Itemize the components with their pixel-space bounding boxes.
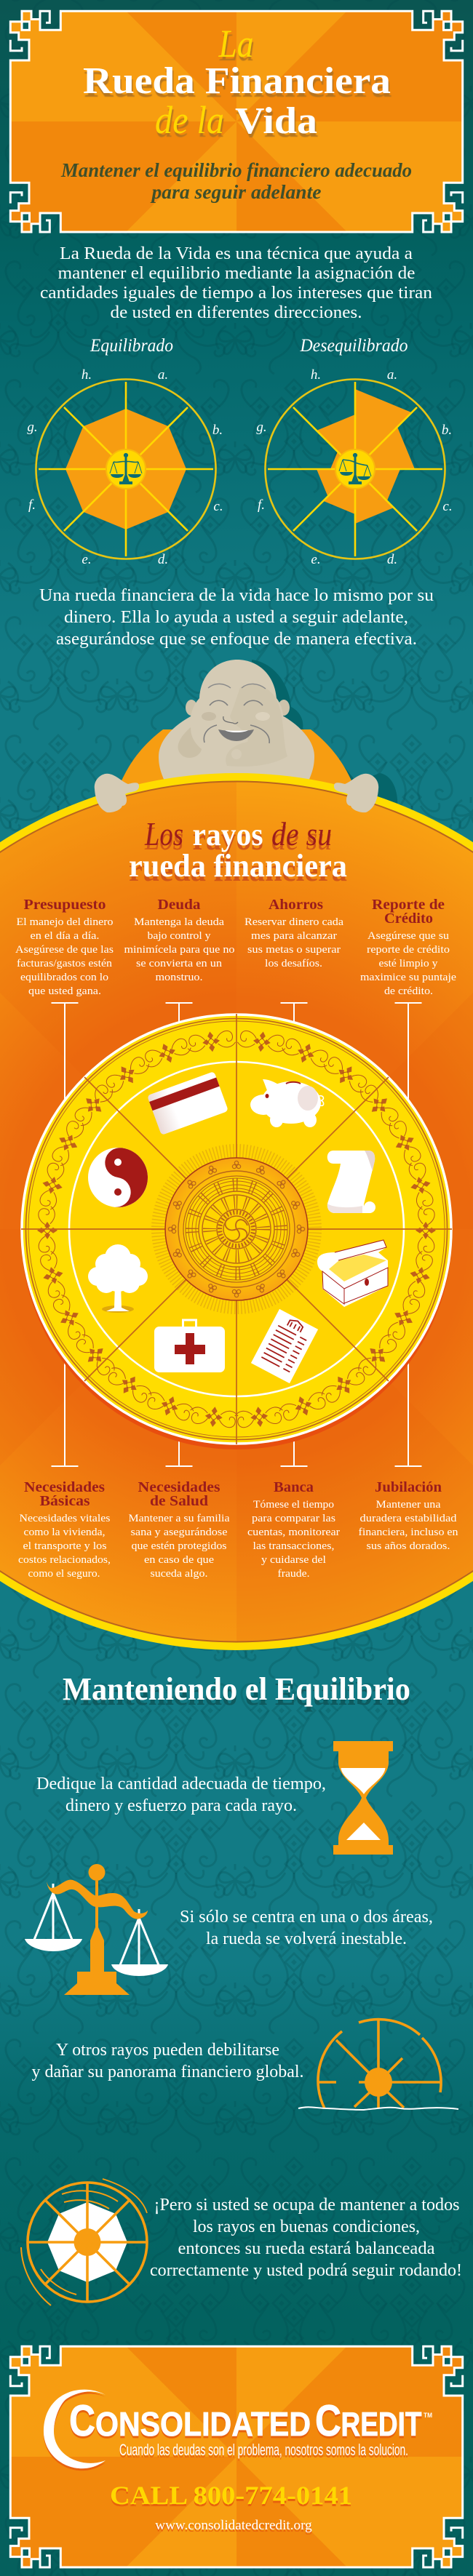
section heading: rayos [192, 817, 263, 852]
callout: necesidades de salud: Mantener a su familia [128, 1513, 230, 1524]
callout: deuda: monstruo. [156, 972, 202, 983]
axis labels: h. [311, 367, 321, 383]
logo wordmark: REDIT [341, 2405, 422, 2443]
logo wordmark: C [69, 2396, 95, 2445]
connector lines [51, 1003, 422, 1466]
section heading: Los [144, 815, 183, 852]
callout: presupuesto: equilibrados con lo [20, 972, 108, 983]
section heading [129, 815, 347, 884]
heading: manteniendo el equilibrio: Manteniendo el Equilibrio [63, 1671, 410, 1707]
chart: balanced wheel: Equilibrado [90, 336, 173, 356]
axis labels: f. [258, 497, 265, 513]
callout: banca: fraude. [278, 1568, 310, 1580]
icon: hourglass [333, 1741, 393, 1855]
header panel [0, 0, 473, 243]
icon: balanced wheel [21, 2179, 147, 2305]
icon: piggy bank [250, 1079, 324, 1127]
callout: deuda: se convierta en un [136, 958, 223, 969]
chart: unbalanced wheel [256, 336, 453, 567]
callout: reporte de credito [360, 897, 456, 997]
section heading: de su [271, 815, 332, 852]
callout: necesidades basicas: como el seguro. [28, 1568, 100, 1580]
callout: ahorros: sus metas o superar [247, 944, 341, 956]
icon: scroll [327, 1151, 375, 1213]
subtitle [60, 159, 412, 203]
illustration: smiling monk [118, 660, 397, 815]
axis labels: g. [256, 420, 267, 435]
wheel hub [165, 1158, 308, 1300]
callout: presupuesto: facturas/gastos estén [17, 958, 113, 969]
icon: tilted scales [339, 453, 371, 484]
text: dedique: Dedique la cantidad adecuada de tiempo, [36, 1775, 326, 1793]
title: Vida [235, 100, 317, 142]
callout: presupuesto [15, 897, 114, 997]
text: si solo se centra [180, 1908, 433, 1948]
axis labels: c. [442, 499, 453, 514]
callout: reporte de credito: maximice su puntaje [360, 972, 456, 983]
icon: credit card [147, 1071, 228, 1135]
axis labels: d. [387, 552, 397, 567]
logo wordmark: ONSOLIDATED [95, 2405, 311, 2443]
text: dedique [36, 1775, 326, 1815]
subtitle: Mantener el equilibrio financiero adecuado [60, 159, 412, 181]
second paragraph: Una rueda financiera de la vida hace lo mismo por su [39, 586, 434, 605]
wheel [21, 1014, 452, 1449]
axis labels: d. [158, 552, 168, 567]
intro text [40, 244, 432, 322]
intro text: de usted en diferentes direcciones. [111, 303, 362, 322]
subtitle: para seguir adelante [150, 181, 322, 203]
footer panel [0, 2335, 473, 2576]
callout: necesidades de salud: sana y asegurándose [131, 1527, 228, 1538]
axis labels: f. [28, 497, 36, 513]
callout: necesidades de salud: que estén protegidos [131, 1540, 227, 1552]
axis labels: h. [82, 367, 92, 383]
monk shadow [251, 660, 397, 815]
logo crescent [44, 2390, 106, 2468]
phone number: CALL 800-774-0141 [110, 2481, 352, 2510]
callout: ahorros: los desafíos. [265, 958, 322, 969]
text: pero si usted: correctamente y usted podrá seguir rodando! [150, 2261, 462, 2280]
ornament ring [37, 1028, 436, 1430]
axis labels [256, 367, 453, 567]
body [159, 716, 314, 784]
section heading: rueda financiera [129, 848, 347, 884]
callout: deuda: bajo control y [147, 930, 211, 942]
intro text: mantener el equilibrio mediante la asignación de [58, 264, 415, 283]
callout: necesidades de salud: Necesidades [138, 1479, 220, 1495]
callout: deuda [124, 897, 234, 983]
callout: ahorros: mes para alcanzar [251, 930, 337, 942]
callout: banca: cuentas, monitorear [247, 1527, 340, 1538]
callout: presupuesto: que usted gana. [28, 985, 101, 997]
title [83, 22, 391, 142]
callout: necesidades basicas: Necesidades vitales [19, 1513, 111, 1524]
text: pero si usted [150, 2196, 462, 2280]
title: Rueda Financiera [83, 60, 391, 102]
text: otros rayos: Y otros rayos pueden debilitarse [56, 2041, 279, 2060]
callout: presupuesto: El manejo del dinero [16, 916, 114, 928]
callout: necesidades basicas: Básicas [39, 1493, 90, 1509]
axis labels: e. [82, 552, 92, 567]
title: La [218, 22, 253, 65]
icon: tree [88, 1244, 148, 1313]
text: si solo se centra: Si sólo se centra en una o dos áreas, [180, 1908, 433, 1927]
icon: bank statement [251, 1309, 318, 1383]
text: otros rayos: y dañar su panorama financiero global. [32, 2063, 304, 2081]
callout: jubilacion: Mantener una [375, 1499, 441, 1511]
text: dedique: dinero y esfuerzo para cada rayo. [65, 1796, 297, 1815]
axis labels: c. [213, 499, 223, 514]
callout: necesidades de salud [128, 1479, 230, 1580]
axis labels: g. [27, 420, 38, 435]
callout: banca: y cuidarse del [261, 1554, 326, 1566]
chart: unbalanced wheel: Desequilibrado [300, 336, 408, 356]
callout: necesidades basicas: Necesidades [24, 1479, 105, 1495]
callout: ahorros: Ahorros [269, 897, 323, 913]
callout: ahorros [245, 897, 343, 969]
callout: necesidades basicas: costos relacionados, [18, 1554, 111, 1566]
callout: necesidades de salud: de Salud [150, 1493, 208, 1509]
callout: banca [247, 1479, 340, 1580]
text: pero si usted: entonces su rueda estará balanceada [178, 2239, 435, 2258]
text: si solo se centra: la rueda se volverá inestable. [206, 1929, 407, 1948]
axis labels: a. [158, 367, 168, 383]
callout: jubilacion [358, 1479, 458, 1552]
axis labels: b. [212, 423, 223, 438]
callout: reporte de credito: Crédito [384, 911, 433, 927]
icon: balance scales [110, 453, 142, 484]
callout: necesidades de salud: en caso de que [144, 1554, 214, 1566]
callout: necesidades basicas: como la vivienda, [23, 1527, 105, 1538]
callout: jubilacion: sus años dorados. [367, 1540, 450, 1552]
axis labels: a. [387, 367, 397, 383]
text: otros rayos [32, 2041, 304, 2081]
logo wordmark [69, 2396, 422, 2445]
callout: jubilacion: financiera, incluso en [358, 1527, 458, 1538]
intro text: cantidades iguales de tiempo a los intereses que tiran [40, 284, 432, 303]
icon: broken wheel [298, 2020, 458, 2110]
robe [118, 729, 355, 789]
chart: balanced wheel [27, 336, 223, 567]
callout: banca: Tómese el tiempo [253, 1499, 334, 1511]
title: de la [155, 98, 224, 142]
callout: reporte de credito: esté limpio y [378, 958, 438, 969]
callout: deuda: Mantenga la deuda [134, 916, 224, 928]
callout: presupuesto: Presupuesto [23, 897, 106, 913]
callout: ahorros: Reservar dinero cada [245, 916, 343, 928]
callout: reporte de credito: reporte de crédito [367, 944, 450, 956]
axis labels: e. [311, 552, 321, 567]
icon: first aid kit [154, 1320, 225, 1372]
logo wordmark: C [315, 2396, 341, 2445]
text: pero si usted: ¡Pero si usted se ocupa de mantener a todos [154, 2196, 460, 2215]
callout: necesidades de salud: suceda algo. [150, 1568, 208, 1580]
text: pero si usted: los rayos en buenas condiciones, [193, 2217, 420, 2236]
axis labels [27, 367, 223, 567]
callout: banca: para comparar las [252, 1513, 335, 1524]
website: www.consolidatedcredit.org [155, 2518, 312, 2533]
callout: jubilacion: Jubilación [375, 1479, 442, 1495]
monk hands [95, 774, 378, 812]
trademark: TM [424, 2412, 432, 2419]
callout: necesidades basicas [18, 1479, 111, 1580]
callout: reporte de credito: Reporte de [372, 897, 445, 913]
head [178, 660, 290, 767]
callout: banca: las transacciones, [253, 1540, 335, 1552]
callout: deuda: Deuda [157, 897, 201, 913]
axis labels: b. [442, 423, 452, 438]
callout: reporte de credito: Asegúrese que su [367, 930, 450, 942]
callout: presupuesto: en el día a día. [31, 930, 99, 942]
callout: banca: Banca [274, 1479, 314, 1495]
callout: necesidades basicas: el transporte y los [23, 1540, 107, 1552]
callout: presupuesto: Asegúrese de que las [15, 944, 114, 956]
second paragraph: dinero. Ella lo ayuda a usted a seguir adelante, [64, 608, 408, 627]
icon: yin yang [88, 1146, 151, 1211]
second paragraph [39, 586, 434, 649]
icon: tilted scales [25, 1864, 168, 1995]
callout: deuda: minimícela para que no [124, 944, 234, 956]
callout: jubilacion: duradera estabilidad [359, 1513, 457, 1524]
icon: treasure chest [317, 1240, 388, 1307]
second paragraph: asegurándose que se enfoque de manera efectiva. [56, 630, 417, 649]
intro text: La Rueda de la Vida es una técnica que ayuda a [60, 244, 413, 263]
big orange wheel section [0, 773, 473, 1650]
callout: reporte de credito: de crédito. [384, 985, 433, 997]
